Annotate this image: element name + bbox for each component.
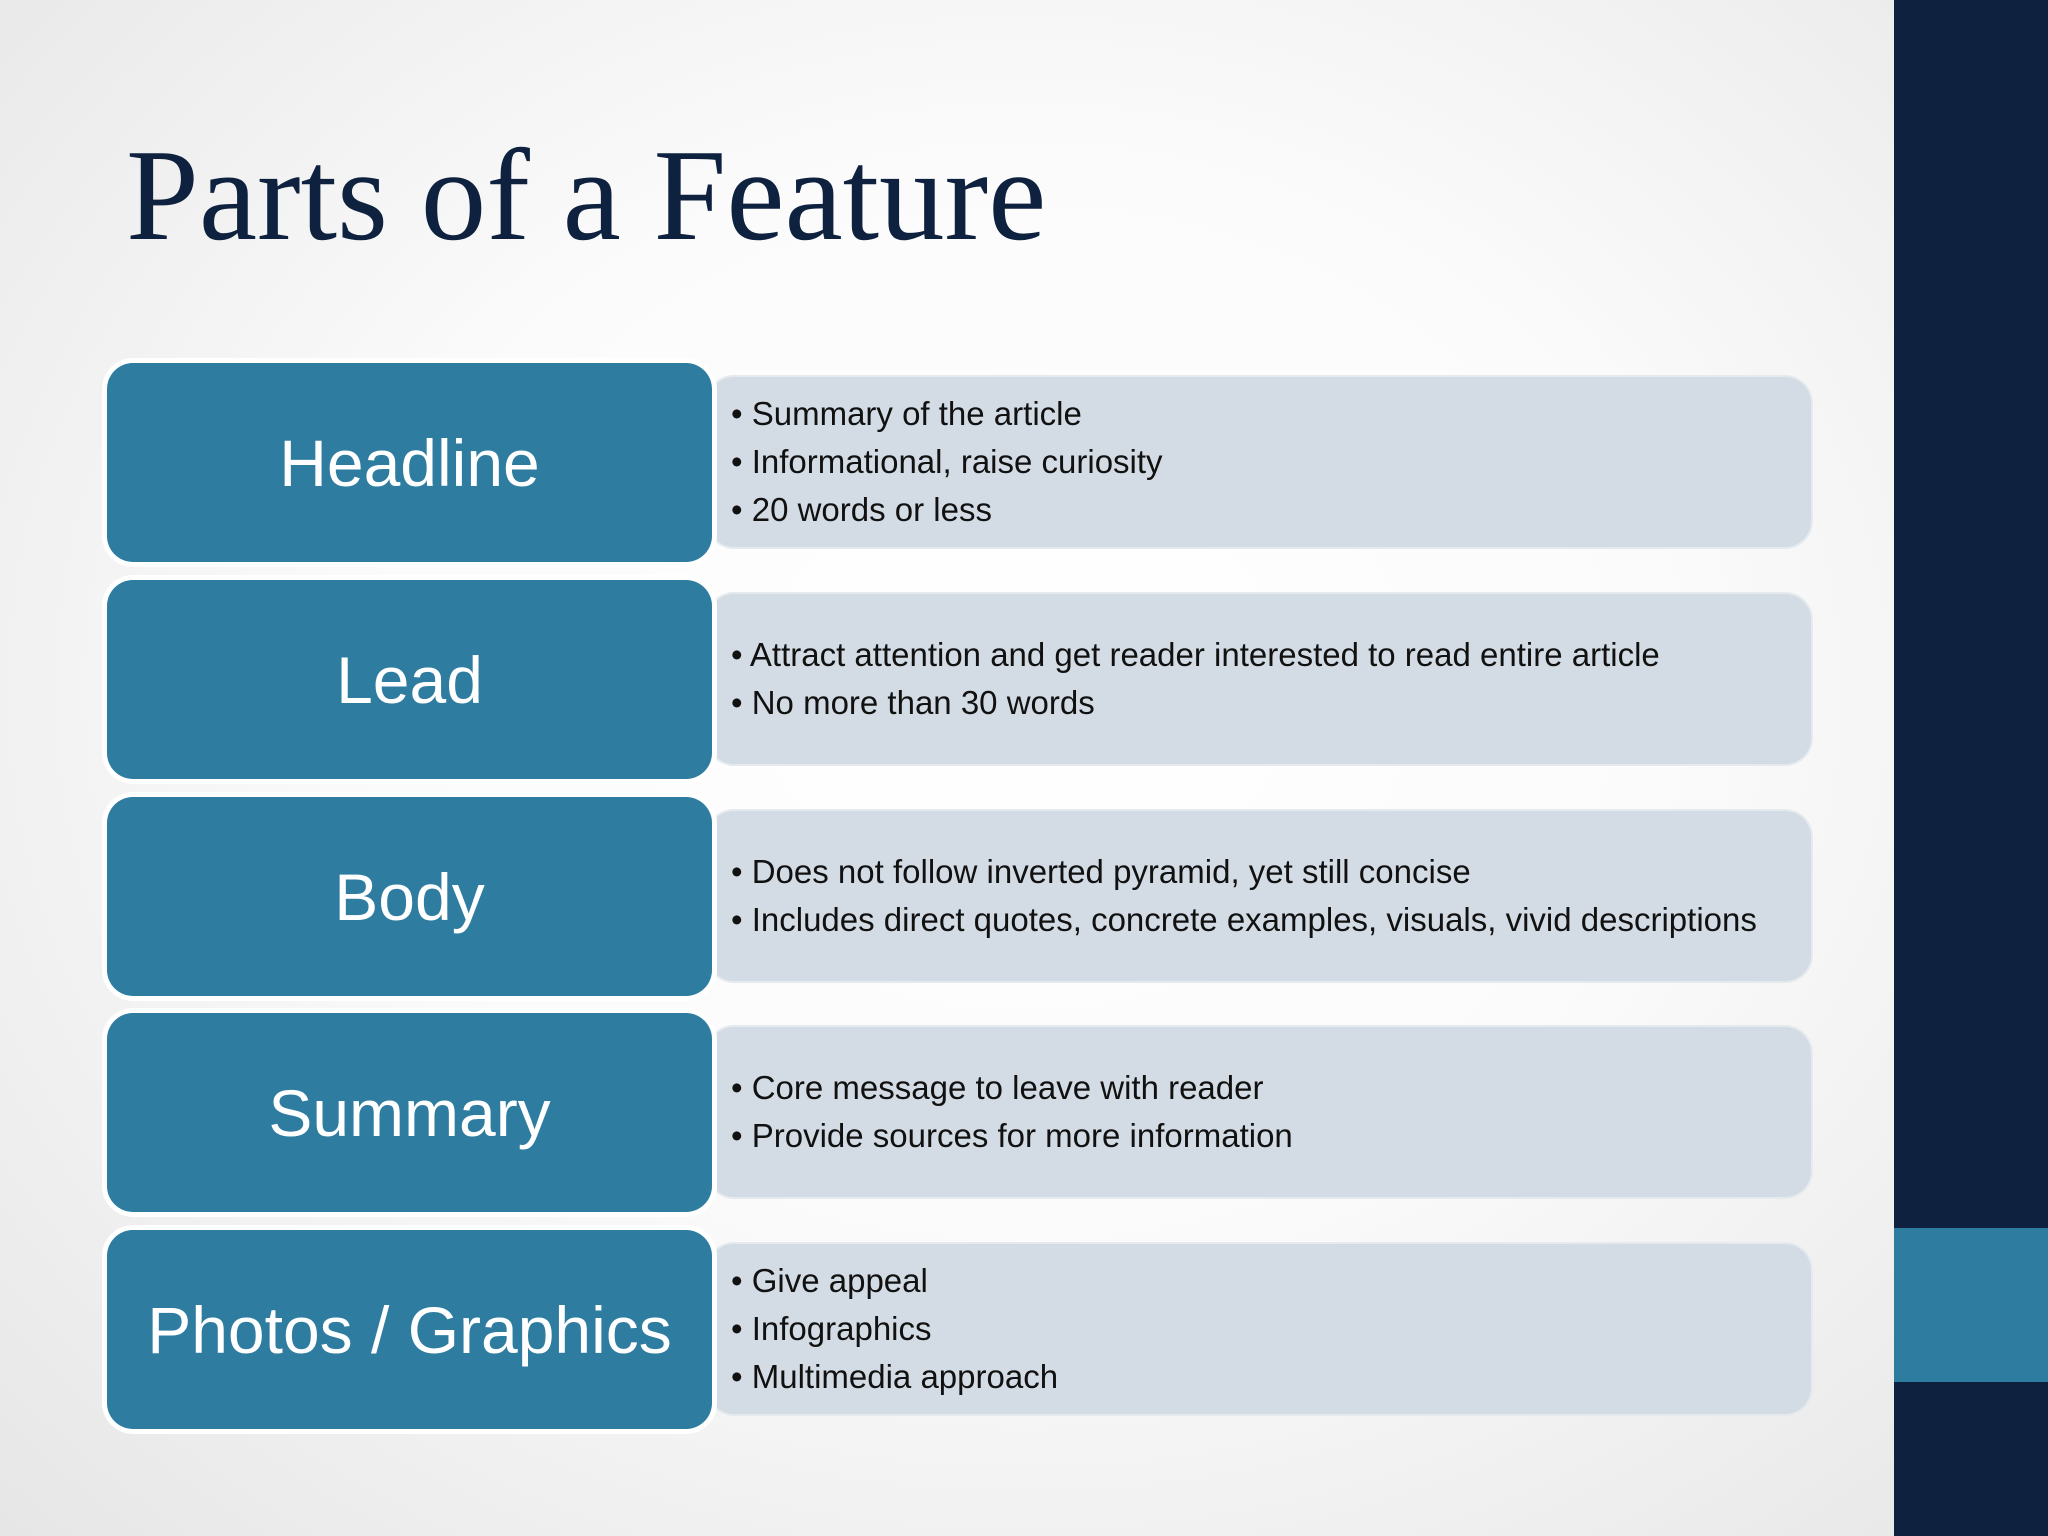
details: headline xyxy=(708,377,1811,547)
label: lead xyxy=(107,580,712,779)
details: summary: • Provide sources for more information xyxy=(731,1117,1293,1154)
label: body: Body xyxy=(334,860,485,934)
row: lead xyxy=(102,575,1813,784)
details: summary: • Core message to leave with reader xyxy=(731,1069,1263,1106)
details: photos: • Infographics xyxy=(731,1310,932,1347)
label: photos xyxy=(107,1230,712,1429)
label: photos: Photos / Graphics xyxy=(147,1292,672,1366)
row: photos xyxy=(102,1225,1813,1434)
title: Parts of a Feature xyxy=(126,123,1046,268)
details: photos xyxy=(708,1244,1811,1414)
details: body: • Does not follow inverted pyramid, yet still concise xyxy=(731,853,1471,890)
details: photos: • Multimedia approach xyxy=(731,1358,1058,1395)
label: summary xyxy=(107,1013,712,1212)
details: headline: • Summary of the article xyxy=(731,395,1082,432)
details: lead: • No more than 30 words xyxy=(731,684,1095,721)
row: headline xyxy=(102,358,1813,567)
accent block xyxy=(1894,1228,2048,1382)
label: headline xyxy=(107,363,712,562)
details: headline: • 20 words or less xyxy=(731,491,992,528)
row: body xyxy=(102,792,1813,1001)
details: lead: • Attract attention and get reader interested to read entire article xyxy=(731,636,1660,673)
details: body: • Includes direct quotes, concrete examples, visuals, vivid descriptions xyxy=(731,901,1757,938)
label: summary: Summary xyxy=(268,1076,551,1150)
label: body xyxy=(107,797,712,996)
details: photos: • Give appeal xyxy=(731,1262,928,1299)
details: headline: • Informational, raise curiosity xyxy=(731,443,1163,480)
details: summary xyxy=(708,1027,1811,1197)
label: lead: Lead xyxy=(336,642,483,716)
dark side bar xyxy=(1894,0,2048,1536)
row: summary xyxy=(102,1008,1813,1217)
details: lead xyxy=(708,594,1811,764)
details: body xyxy=(708,811,1811,981)
label: headline: Headline xyxy=(279,426,540,500)
